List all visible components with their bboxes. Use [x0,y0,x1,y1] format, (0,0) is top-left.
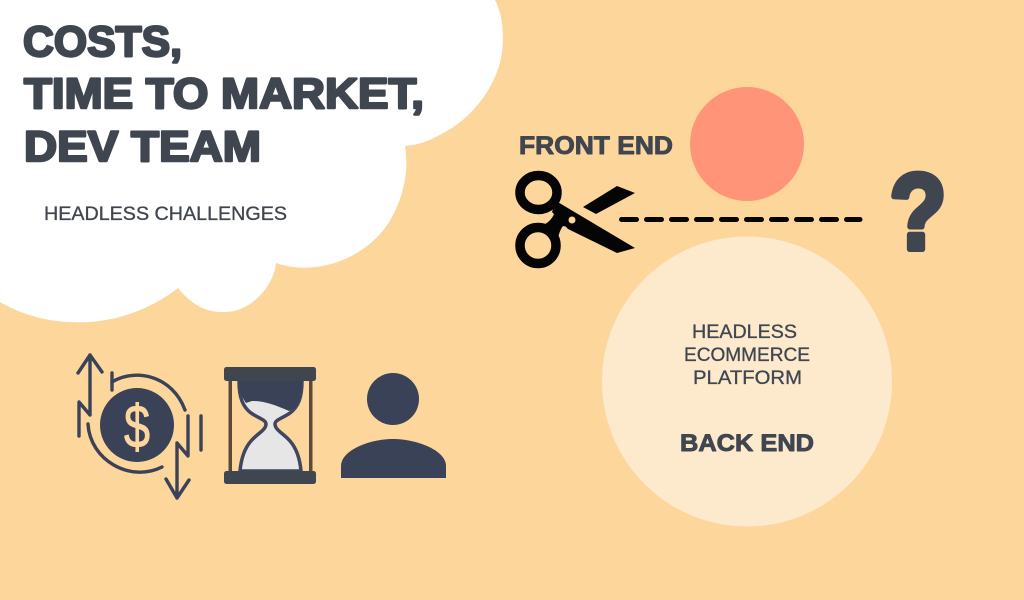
icon: costs dollar with arrows: $ [124,393,150,460]
title: COSTS, [23,18,182,66]
text: headless ecommerce platform [684,322,810,389]
text: headless ecommerce platform: HEADLESS [692,322,797,343]
panel: white cloud [0,0,503,322]
title: TIME TO MARKET, [24,70,424,118]
text: headless ecommerce platform: ECOMMERCE [684,345,810,366]
label: back end: BACK END [680,430,814,457]
title [23,18,424,171]
cut line [622,217,860,222]
title: DEV TEAM [24,123,261,171]
subtitle: HEADLESS CHALLENGES [44,204,287,225]
icon: costs dollar with arrows [78,355,201,498]
label: front end: FRONT END [519,132,673,160]
icon: scissors [520,176,635,264]
icon: person [341,373,446,478]
back end circle [602,236,892,526]
front end circle [690,87,804,201]
text: headless ecommerce platform: PLATFORM [693,368,802,389]
icon: hourglass [224,367,316,484]
icon: question mark: ? [890,151,946,272]
